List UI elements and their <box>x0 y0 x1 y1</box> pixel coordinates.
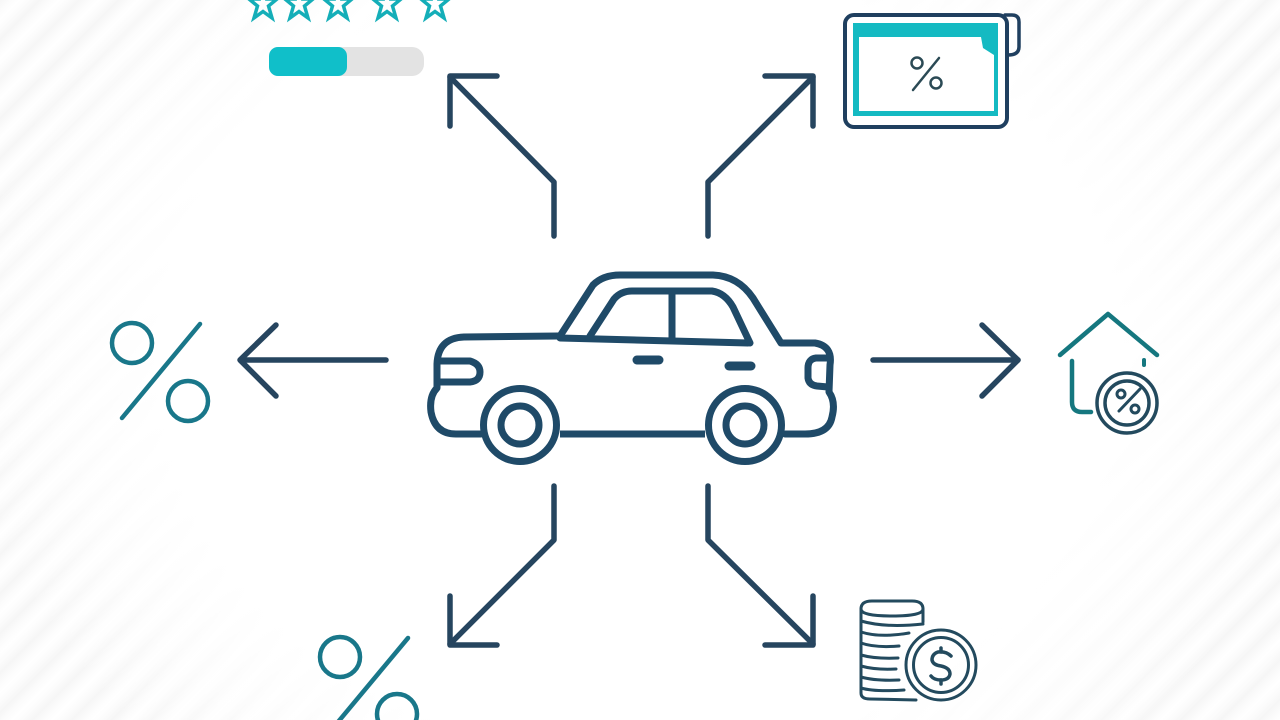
progress bar <box>269 47 424 76</box>
icon: car <box>431 275 833 462</box>
arrow: bottom-right <box>708 486 813 645</box>
arrow: left <box>240 325 386 396</box>
arrow: top-right <box>708 76 813 236</box>
arrow: bottom-left <box>450 486 554 645</box>
arrow: top-left <box>450 76 554 236</box>
icon: coin stack with dollar coin <box>861 601 976 700</box>
arrow: right <box>873 325 1018 396</box>
icon: rating stars <box>249 0 449 18</box>
icon: large percent left <box>112 323 208 421</box>
icon: large percent bottom <box>320 637 417 720</box>
icon: tablet with percent <box>845 15 1019 127</box>
icon: house with percent coin <box>1060 314 1157 433</box>
